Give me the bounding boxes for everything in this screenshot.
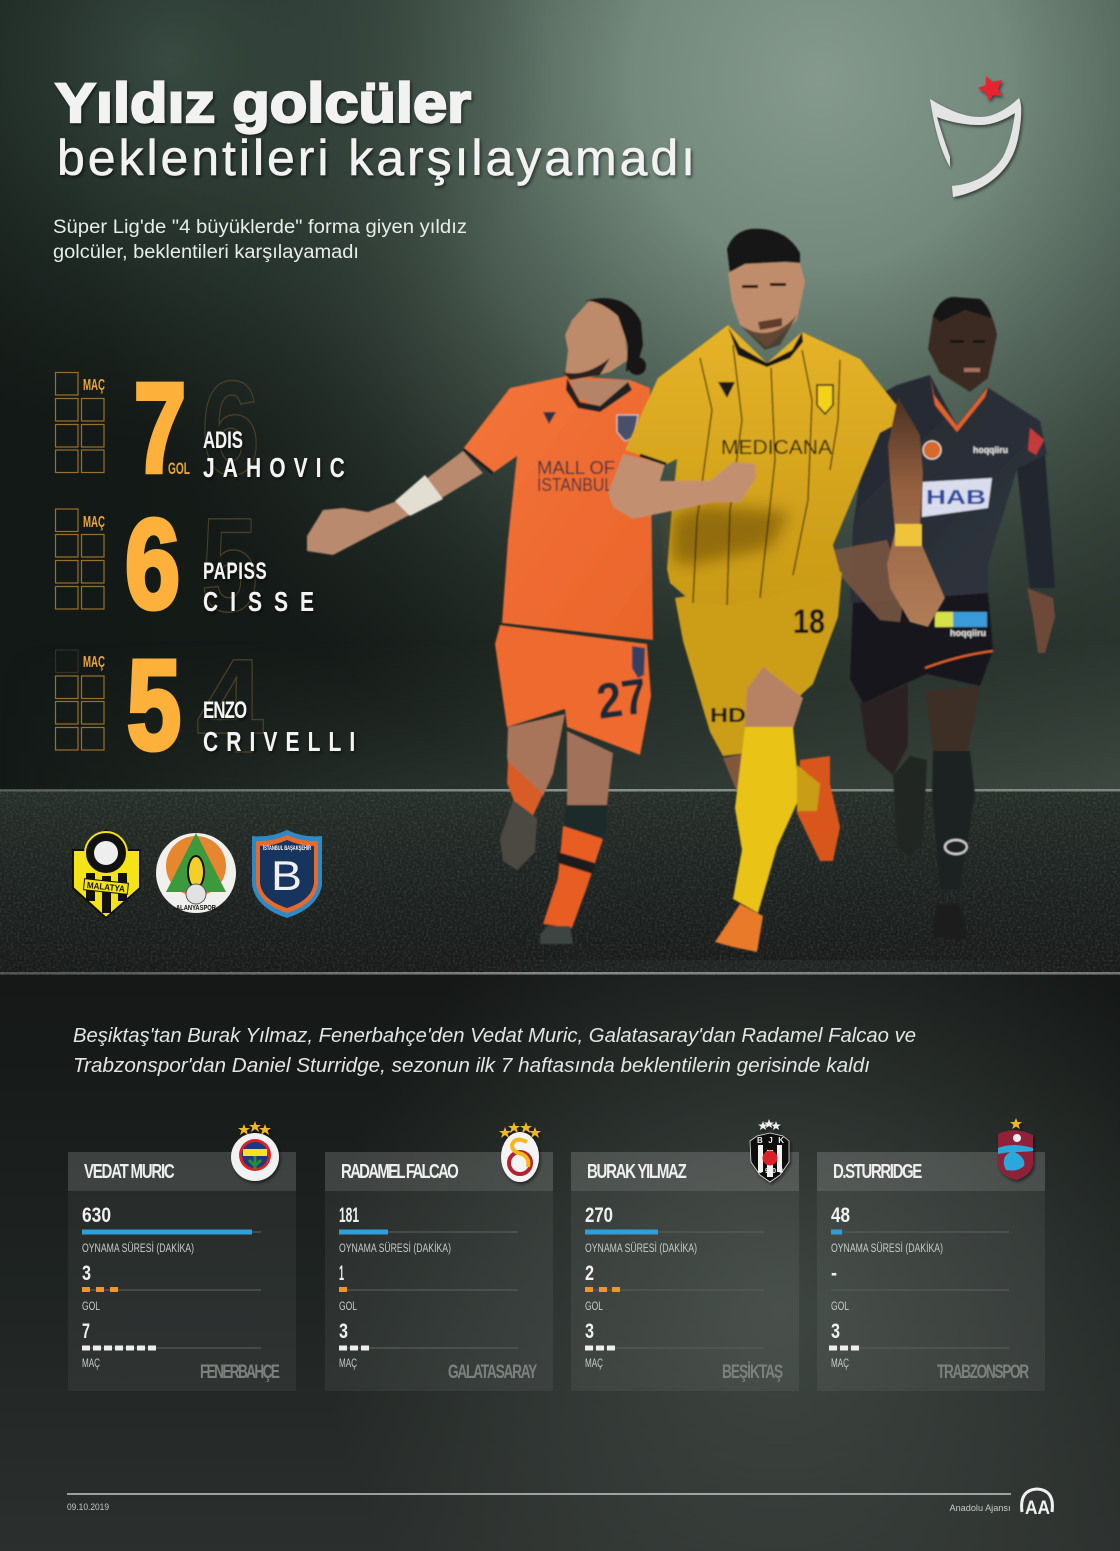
player: Jahovic centre figure (yellow kit): 18 [793, 603, 825, 641]
club logos: Malatya, Alanya, Başakşehir [73, 830, 322, 918]
player: Papiss Cisse (dark kit): HAB [926, 487, 986, 509]
player: Jahovic centre figure (yellow kit) [608, 229, 945, 952]
title: beklentileri karşılayamadı [57, 130, 695, 186]
panel: Vedat Muric: VEDAT MURIC [84, 1160, 175, 1183]
panel: Burak Yılmaz: MAÇ [585, 1358, 603, 1370]
panel: Burak Yılmaz: BEŞİKTAŞ [722, 1361, 783, 1383]
player: Adis Jahovic (orange kit) [307, 298, 653, 944]
panel: D.Sturridge: TRABZONSPOR [937, 1361, 1029, 1383]
panel: Radamel Falcao: GOL [339, 1301, 357, 1313]
stat row: Enzo Crivelli: ENZO [203, 697, 247, 724]
match grid 6 [56, 509, 104, 609]
icon: Başakşehir badge: İSTANBUL BAŞAKŞEHİR [263, 845, 311, 852]
panel: Radamel Falcao: MAÇ [339, 1358, 357, 1370]
match grid 5 [56, 650, 104, 750]
panel: Vedat Muric: 7 [82, 1320, 90, 1343]
intro paragraph [73, 1025, 916, 1077]
stat row: Papiss Cisse [56, 491, 314, 640]
stat row: Enzo Crivelli: 4 [196, 632, 264, 781]
panel: Vedat Muric: FENERBAHÇE [200, 1361, 280, 1383]
panel: Radamel Falcao: RADAMEL FALCAO [341, 1160, 459, 1183]
panel: Vedat Muric: GOL [82, 1301, 100, 1313]
title [55, 71, 695, 186]
stat row: Adis Jahovic: GOL [168, 459, 190, 478]
stat row: Enzo Crivelli: MAÇ [83, 654, 105, 671]
stat row: Papiss Cisse: CISSE [203, 587, 314, 618]
icon: Yeni Malatyaspor badge: MALATYA [86, 880, 126, 894]
match grid 7 [56, 372, 104, 472]
icon: Beşiktaş badge: 1903 [758, 1168, 783, 1175]
panel: Burak Yılmaz: 270 [585, 1204, 613, 1227]
panel: D.Sturridge: GOL [831, 1301, 849, 1313]
subtitle: Süper Lig'de "4 büyüklerde" forma giyen yıldız [53, 217, 467, 238]
stat row: Papiss Cisse: PAPISS [203, 558, 267, 585]
panel: Vedat Muric: MAÇ [82, 1358, 100, 1370]
stat row: Papiss Cisse: MAÇ [83, 514, 105, 531]
subtitle [53, 217, 467, 263]
panel: Burak Yılmaz [571, 1119, 799, 1391]
footer: 09.10.2019 [67, 1502, 109, 1513]
panel: D.Sturridge: D.STURRIDGE [833, 1160, 922, 1183]
icon: Anadolu Ajansı logo: AA [1025, 1498, 1050, 1519]
player: Jahovic centre figure (yellow kit): MEDICANA [721, 437, 833, 459]
stat row: Adis Jahovic [56, 354, 345, 503]
panel: D.Sturridge: MAÇ [831, 1358, 849, 1370]
icon: Anadolu Ajansı logo [1022, 1489, 1052, 1519]
panel: Radamel Falcao: 3 [339, 1320, 348, 1343]
panel: Burak Yılmaz: OYNAMA SÜRESİ (DAKİKA) [585, 1242, 697, 1255]
stat row: Adis Jahovic: 6 [201, 354, 260, 503]
panel: Radamel Falcao: OYNAMA SÜRESİ (DAKİKA) [339, 1242, 451, 1255]
icon: Galatasaray badge [499, 1122, 541, 1182]
footer [67, 1489, 1052, 1519]
stat row: Papiss Cisse: 6 [125, 493, 180, 635]
icon: Beşiktaş badge [750, 1119, 789, 1182]
panel: Vedat Muric: OYNAMA SÜRESİ (DAKİKA) [82, 1242, 194, 1255]
panel: Radamel Falcao: 1 [339, 1262, 344, 1285]
title: Yıldız golcüler [55, 71, 471, 134]
intro paragraph: Trabzonspor'dan Daniel Sturridge, sezonun ilk 7 haftasında beklentilerin gerisinde kaldı [73, 1055, 870, 1077]
stat row: Adis Jahovic: 7 [134, 356, 186, 498]
player: Jahovic centre figure (yellow kit): HD [710, 705, 746, 727]
stat row: Adis Jahovic: JAHOVIC [203, 453, 345, 484]
icon: Süper Lig logo [930, 76, 1021, 197]
panel: Burak Yılmaz: 3 [585, 1320, 594, 1343]
player: Papiss Cisse (dark kit): hoqqiiru [950, 628, 986, 638]
panel: Radamel Falcao: 181 [339, 1204, 359, 1227]
footer: Anadolu Ajansı [950, 1503, 1010, 1514]
stat row: Papiss Cisse: 5 [201, 491, 258, 640]
player: Papiss Cisse (dark kit): hoqqiiru [973, 445, 1008, 455]
icon: Alanyaspor badge: ALANYASPOR [176, 903, 216, 912]
icon: Yeni Malatyaspor badge [73, 830, 140, 918]
icon: Beşiktaş badge: BJK [757, 1136, 784, 1145]
panel: Burak Yılmaz: GOL [585, 1301, 603, 1313]
stat row: Enzo Crivelli [56, 632, 355, 781]
stat row: Adis Jahovic: MAÇ [83, 377, 105, 394]
player: Adis Jahovic (orange kit): MALL OF [537, 458, 615, 478]
panel: Vedat Muric [68, 1121, 296, 1391]
icon: Başakşehir badge: B [271, 852, 302, 899]
intro paragraph: Beşiktaş'tan Burak Yılmaz, Fenerbahçe'den Vedat Muric, Galatasaray'dan Radamel Falcao ve [73, 1025, 916, 1047]
panel: Burak Yılmaz: BURAK YILMAZ [587, 1160, 687, 1183]
icon: Alanyaspor badge [156, 833, 236, 913]
panel: Burak Yılmaz: 2 [585, 1262, 594, 1285]
panel: D.Sturridge [817, 1118, 1045, 1391]
panel: Radamel Falcao: GALATASARAY [448, 1361, 537, 1383]
stat row: Enzo Crivelli: CRIVELLI [203, 727, 355, 758]
stat row: Adis Jahovic: ADIS [203, 427, 243, 454]
panel: D.Sturridge: OYNAMA SÜRESİ (DAKİKA) [831, 1242, 943, 1255]
icon: Fenerbahçe badge [231, 1121, 279, 1181]
panel: Radamel Falcao [325, 1122, 553, 1391]
panel: D.Sturridge: 3 [831, 1320, 840, 1343]
panel: Vedat Muric: 3 [82, 1262, 91, 1285]
panel: D.Sturridge: - [831, 1262, 837, 1285]
player: Adis Jahovic (orange kit): İSTANBUL [537, 475, 613, 495]
icon: Trabzonspor badge [998, 1118, 1033, 1180]
stat row: Enzo Crivelli: 5 [127, 634, 181, 776]
icon: Başakşehir badge [252, 830, 322, 918]
panel: Vedat Muric: 630 [82, 1204, 111, 1227]
panel: D.Sturridge: 48 [831, 1204, 850, 1227]
subtitle: golcüler, beklentileri karşılayamadı [53, 242, 359, 263]
player: Papiss Cisse (dark kit) [833, 297, 1055, 940]
player: Adis Jahovic (orange kit): 27 [593, 668, 650, 730]
